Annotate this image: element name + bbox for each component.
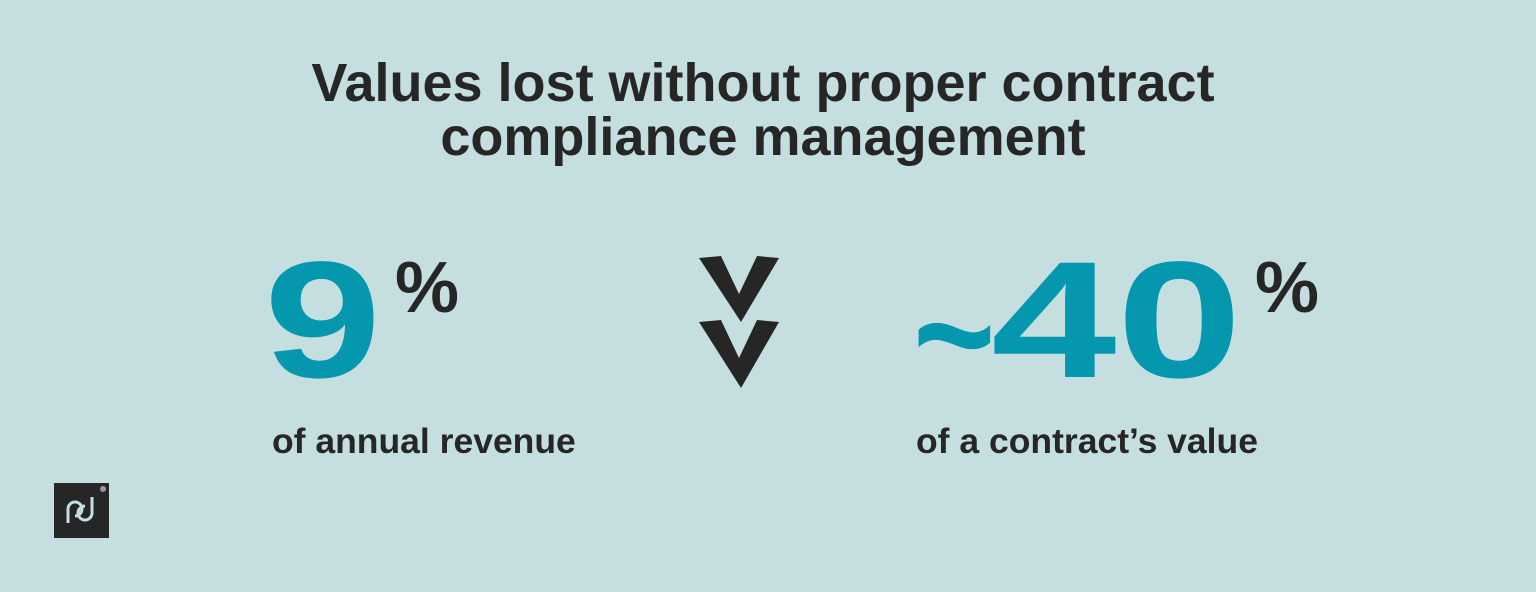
icon: double chevron	[699, 256, 779, 388]
title: Values lost without proper contract	[311, 53, 1215, 113]
digits 40: 40	[991, 228, 1242, 413]
number ~40	[913, 228, 1242, 427]
title: compliance management	[440, 107, 1086, 167]
percent sign: %	[395, 248, 459, 328]
number 9: 9	[264, 228, 381, 413]
logo	[54, 483, 109, 538]
stat: ~40%	[913, 228, 1319, 461]
title	[311, 53, 1215, 167]
caption: of a contract’s value	[916, 421, 1258, 461]
percent sign: %	[1255, 248, 1319, 328]
tilde: ~	[913, 242, 995, 427]
caption: of annual revenue	[272, 421, 576, 461]
stat: 9%	[264, 228, 576, 461]
